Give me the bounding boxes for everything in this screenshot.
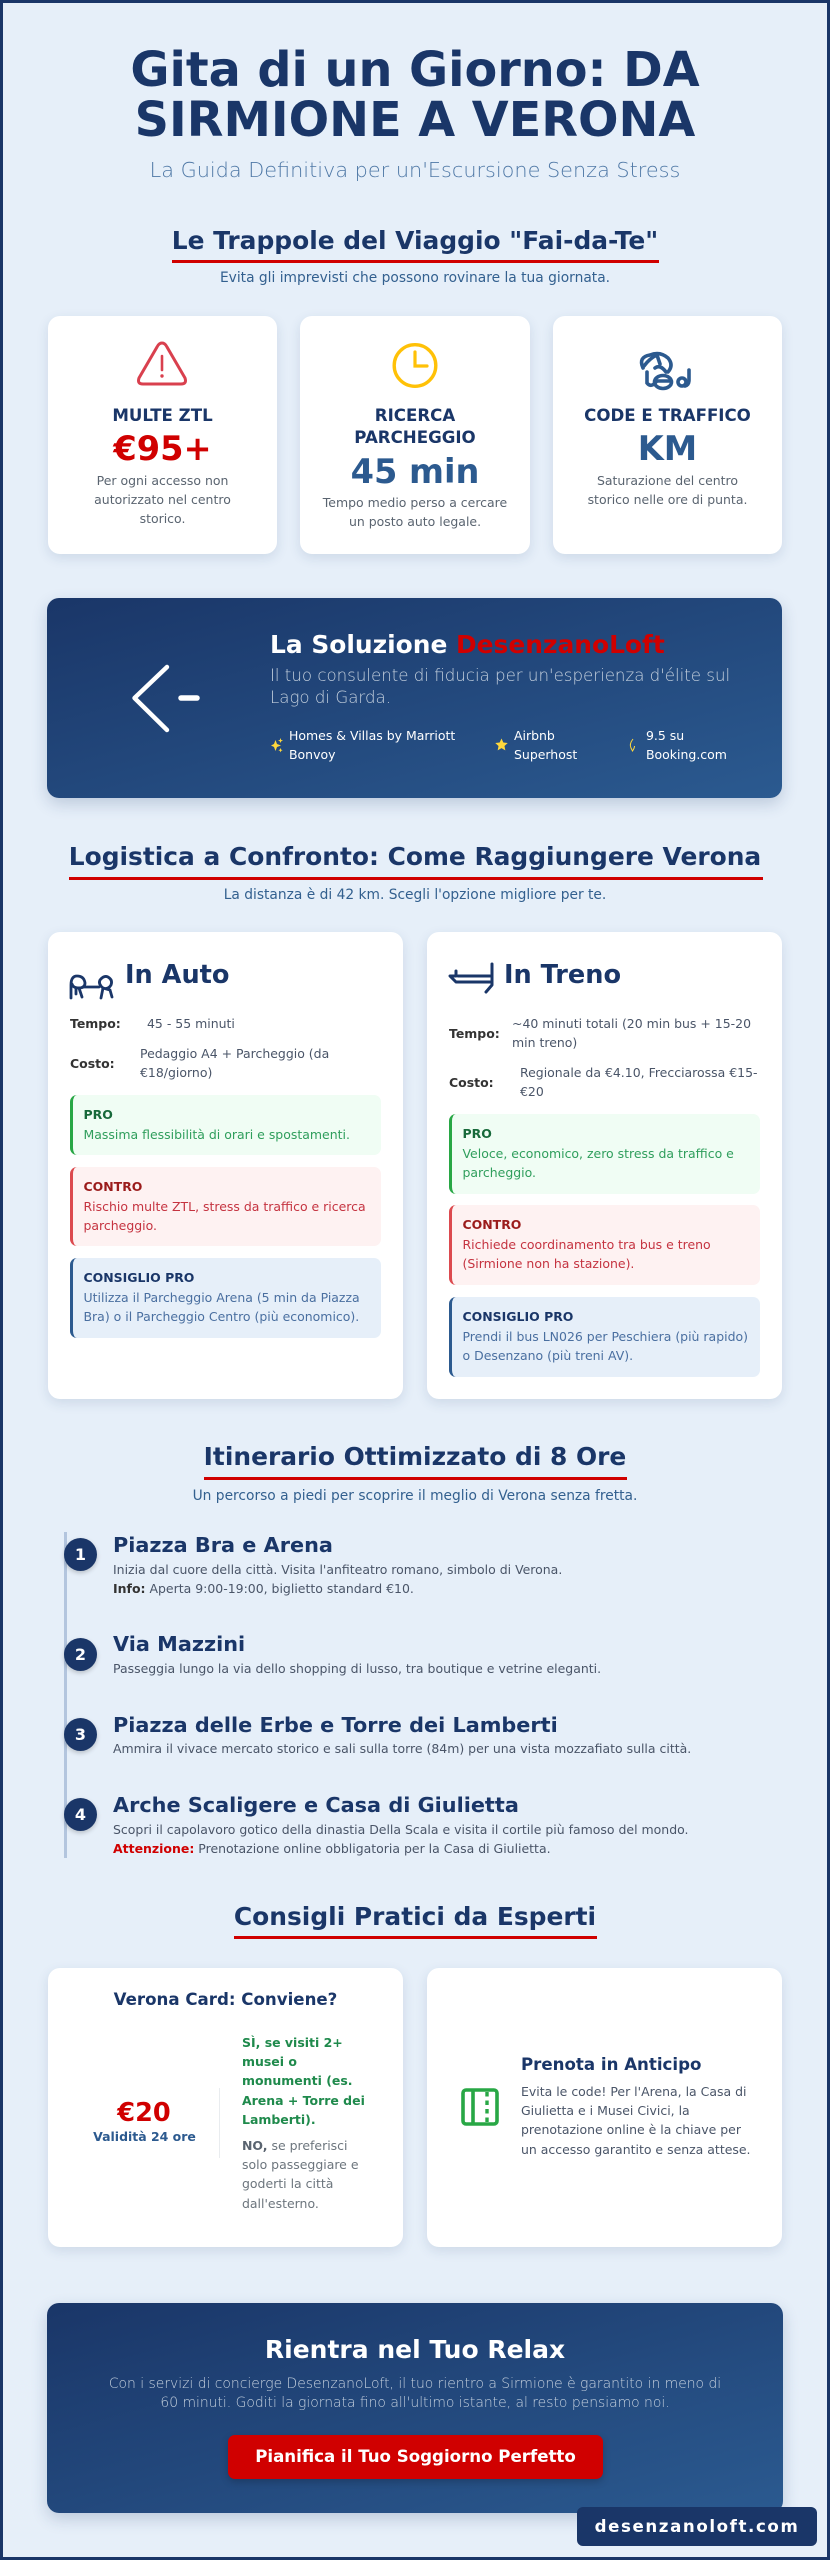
badge: booking: 9.5 su: [646, 728, 684, 743]
text: rientra: 60 minuti. Goditi la giornata fino all'ultimo istante, al resto pensiamo noi.: [160, 2395, 670, 2411]
step 4: [62, 1793, 688, 1856]
heading: prenota: Prenota in Anticipo: [521, 2055, 701, 2074]
text: no: dall'esterno.: [242, 2196, 319, 2211]
panel: verona card: [48, 1968, 403, 2247]
footer badge: website: desenzanoloft.com: [595, 2517, 799, 2536]
text: no: [242, 2138, 358, 2211]
callout: pro treno: [449, 1114, 760, 1194]
label: multe ztl: MULTE ZTL: [112, 406, 213, 425]
text: no: NO, se preferisci: [242, 2138, 348, 2153]
panel: la soluzione: [47, 598, 782, 798]
heading: trappole: Le Trappole del Viaggio "Fai-da-Te": [172, 226, 658, 255]
label: ricerca parcheggio: RICERCA: [375, 406, 455, 425]
stat: 45 min: 45 min: [351, 452, 479, 491]
step 4: Arche Scaligere e Casa di Giulietta: [113, 1793, 519, 1817]
row: tempo treno: [449, 1016, 751, 1050]
icon: clock: [392, 343, 438, 388]
step 2: 2: [75, 1645, 86, 1664]
text: parcheggio: un posto auto legale.: [349, 514, 481, 529]
callout: consiglio treno: Prendi il bus LN026 per Peschiera (più rapido): [462, 1329, 748, 1344]
text: parcheggio: Tempo medio perso a cercare: [323, 495, 507, 510]
text: prenota: Evita le code! Per l'Arena, la Casa di: [521, 2084, 746, 2099]
step 1: [62, 1533, 562, 1596]
callout: contro treno: (Sirmione non ha stazione).: [462, 1256, 634, 1271]
callout: contro auto: parcheggio.: [84, 1218, 157, 1233]
callout: pro auto: Massima flessibilità di orari e spostamenti.: [84, 1127, 350, 1142]
callout: pro treno: PRO: [462, 1126, 492, 1141]
text: soluzione: Il tuo consulente di fiducia per un'esperienza d'élite sul: [270, 666, 730, 685]
step 4: Scopri il capolavoro gotico della dinastia Della Scala e visita il cortile più famoso del mondo.: [113, 1822, 688, 1837]
step 3: Piazza delle Erbe e Torre dei Lamberti: [113, 1713, 558, 1737]
title: SIRMIONE A VERONA: [135, 93, 695, 148]
text: rientra: [109, 2376, 721, 2411]
footer badge: website: [577, 2507, 817, 2546]
badge: airbnb: Airbnb: [514, 728, 555, 743]
badge: marriott: Homes & Villas by Marriott: [289, 728, 455, 743]
step 3: Ammira il vivace mercato storico e sali sulla torre (84m) per una vista mozzafiato sulla città.: [113, 1741, 691, 1756]
step 3: 3: [75, 1725, 86, 1744]
text: traffico: Saturazione del centro: [597, 473, 738, 488]
text: si: Lamberti).: [242, 2112, 316, 2127]
title: [130, 43, 700, 148]
panel: in auto: [48, 932, 403, 1399]
step 3: [62, 1713, 691, 1756]
panel: prenota in anticipo: [427, 1968, 782, 2247]
row: costo auto: [70, 1046, 329, 1080]
callout: consiglio treno: o Desenzano (più treni AV).: [462, 1348, 633, 1363]
icon: car: [70, 974, 114, 1000]
text: prenota: prenotazione online è la chiave per: [521, 2122, 741, 2137]
step 1: Inizia dal cuore della città. Visita l'anfiteatro romano, simbolo di Verona.: [113, 1562, 562, 1577]
text: prenota: [521, 2084, 751, 2157]
title: Gita di un Giorno: DA: [130, 43, 700, 98]
callout: contro auto: CONTRO: [84, 1179, 142, 1194]
icon: ticket: [461, 2088, 499, 2126]
stat: 20 euro: €20: [117, 2098, 171, 2128]
row: costo treno: Regionale da €4.10, Frecciarossa €15-: [520, 1065, 758, 1080]
heading: rientra: Rientra nel Tuo Relax: [265, 2335, 565, 2364]
step 2: Passeggia lungo la via dello shopping di lusso, tra boutique e vetrine eleganti.: [113, 1661, 601, 1676]
text: soluzione: Lago di Garda.: [270, 688, 391, 707]
label: validita: Validità 24 ore: [93, 2129, 196, 2144]
step 1: 1: [75, 1545, 86, 1564]
text: parcheggio: [322, 495, 507, 529]
text: no: solo passeggiare e: [242, 2157, 358, 2172]
row: costo treno: [449, 1065, 758, 1099]
icon: train: [448, 962, 494, 994]
row: tempo treno: min treno): [512, 1035, 577, 1050]
icon: traffic: [640, 352, 691, 390]
badge: airbnb: Superhost: [514, 747, 577, 762]
callout: pro auto: PRO: [84, 1107, 113, 1122]
button: pianifica: Pianifica il Tuo Soggiorno Perfetto: [255, 2447, 576, 2466]
row: tempo auto: Tempo:: [70, 1016, 121, 1031]
step 2: [62, 1632, 601, 1676]
text: si: monumenti (es.: [242, 2073, 353, 2088]
callout: consiglio treno: [449, 1297, 760, 1377]
text: rientra: Con i servizi di concierge DesenzanoLoft, il tuo rientro a Sirmione è garantito in meno di: [109, 2376, 721, 2392]
text: no: goderti la città: [242, 2176, 333, 2191]
callout: consiglio auto: [70, 1258, 381, 1338]
callout: contro auto: [70, 1167, 381, 1246]
text: prenota: un accesso garantito e senza attese.: [521, 2142, 751, 2157]
subheading: itinerario: Un percorso a piedi per scoprire il meglio di Verona senza fretta.: [193, 1488, 637, 1504]
panel: multe ztl: [48, 316, 277, 554]
panel: cta rientra: [47, 2303, 783, 2513]
row: tempo auto: [70, 1016, 235, 1031]
icon: logo chevron: [132, 664, 200, 732]
callout: pro auto: [70, 1095, 381, 1155]
heading: itinerario: Itinerario Ottimizzato di 8 Ore: [204, 1442, 626, 1471]
row: costo treno: Costo:: [449, 1075, 494, 1090]
row: costo auto: €18/giorno): [140, 1065, 212, 1080]
callout: pro treno: Veloce, economico, zero stress da traffico e: [462, 1146, 734, 1161]
heading: consigli: Consigli Pratici da Esperti: [234, 1902, 596, 1931]
text: si: SÌ, se visiti 2+: [242, 2035, 343, 2050]
row: costo treno: €20: [520, 1084, 544, 1099]
row: costo auto: Costo:: [70, 1056, 115, 1071]
step 2: Via Mazzini: [113, 1632, 245, 1656]
callout: contro treno: Richiede coordinamento tra bus e treno: [462, 1237, 711, 1252]
callout: consiglio auto: Bra) o il Parcheggio Centro (più economico).: [84, 1309, 359, 1324]
text: multe: Per ogni accesso non: [97, 473, 228, 488]
step 1: Piazza Bra e Arena: [113, 1533, 333, 1557]
text: si: musei o: [242, 2054, 297, 2069]
badge: booking: Booking.com: [646, 747, 727, 762]
subheading: trappole: Evita gli imprevisti che possono rovinare la tua giornata.: [220, 270, 610, 286]
row: tempo treno: ~40 minuti totali (20 min bus + 15-20: [512, 1016, 751, 1031]
subheading: logistica: La distanza è di 42 km. Scegli l'opzione migliore per te.: [224, 887, 606, 903]
button: pianifica: [228, 2435, 603, 2479]
icon: warning triangle: [137, 342, 187, 386]
callout: contro treno: [449, 1205, 760, 1285]
heading: in treno: In Treno: [504, 960, 621, 990]
step 4: Attenzione: Prenotazione online obbligatoria per la Casa di Giulietta.: [113, 1841, 551, 1856]
heading: in auto: In Auto: [125, 960, 230, 990]
text: multe: autorizzato nel centro: [94, 492, 231, 507]
stat: km: KM: [638, 429, 697, 468]
label: ricerca parcheggio: PARCHEGGIO: [354, 428, 476, 447]
badge: marriott: Bonvoy: [289, 747, 335, 762]
text: prenota: Giulietta e i Musei Civici, la: [521, 2103, 690, 2118]
panel: ricerca parcheggio: [300, 316, 530, 554]
subtitle: La Guida Definitiva per un'Escursione Senza Stress: [150, 158, 680, 182]
callout: contro auto: Rischio multe ZTL, stress da traffico e ricerca: [84, 1199, 366, 1214]
badge: marriott: [271, 728, 455, 762]
panel: in treno: [427, 932, 782, 1399]
callout: contro treno: CONTRO: [462, 1217, 521, 1232]
text: si: Arena + Torre dei: [242, 2093, 365, 2108]
panel: code e traffico: [553, 316, 782, 554]
stat: 95 euro: €95+: [113, 429, 212, 468]
row: tempo auto: 45 - 55 minuti: [147, 1016, 235, 1031]
heading: logistica: Logistica a Confronto: Come Raggiungere Verona: [69, 842, 761, 871]
text: si: [242, 2035, 365, 2127]
label: code e traffico: CODE E TRAFFICO: [584, 406, 751, 425]
row: tempo treno: Tempo:: [449, 1026, 500, 1041]
step 1: Info: Aperta 9:00-19:00, biglietto standard €10.: [113, 1581, 414, 1596]
callout: pro treno: parcheggio.: [462, 1165, 536, 1180]
label: ricerca parcheggio: [354, 406, 476, 447]
heading: la soluzione: La Soluzione DesenzanoLoft: [270, 630, 665, 659]
row: costo auto: Pedaggio A4 + Parcheggio (da: [140, 1046, 329, 1061]
callout: consiglio auto: Utilizza il Parcheggio Arena (5 min da Piazza: [84, 1290, 360, 1305]
text: soluzione: [270, 666, 730, 707]
badge: airbnb: [495, 728, 577, 762]
badge: booking: [630, 728, 727, 762]
text: multe: [94, 473, 231, 526]
callout: consiglio treno: CONSIGLIO PRO: [462, 1309, 573, 1324]
text: traffico: storico nelle ore di punta.: [588, 492, 747, 507]
text: traffico: [588, 473, 747, 507]
callout: consiglio auto: CONSIGLIO PRO: [84, 1270, 194, 1285]
step 4: 4: [75, 1805, 86, 1824]
text: multe: storico.: [140, 511, 185, 526]
heading: verona card: Verona Card: Conviene?: [114, 1990, 337, 2009]
